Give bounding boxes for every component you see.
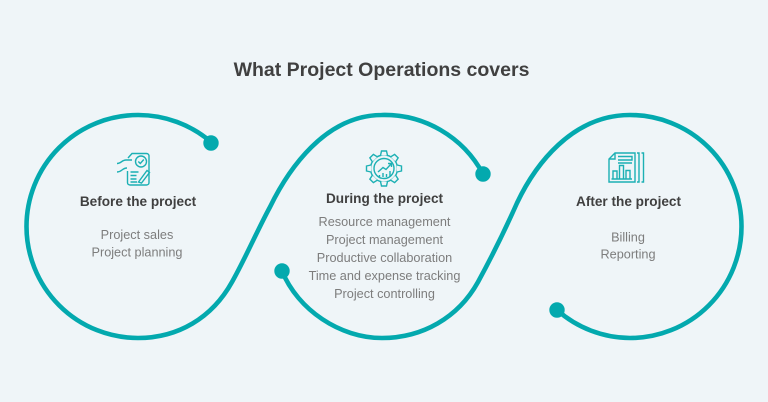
dot: last curve end <box>549 302 565 318</box>
text block: during items: Project controlling <box>334 287 435 301</box>
text block: after items <box>600 230 656 262</box>
text block: during items: Resource management <box>319 215 451 229</box>
text block: before items: Project sales <box>101 228 173 242</box>
text block: during items: Productive collaboration <box>317 251 452 265</box>
text block: before items <box>92 228 182 260</box>
panel: before the project <box>80 194 197 260</box>
heading: after: After the project <box>576 194 681 209</box>
text block: before items: Project planning <box>92 246 182 260</box>
flowing curve: first and middle loops <box>26 115 483 338</box>
text block: during items: Time and expense tracking <box>309 269 460 283</box>
title: What Project Operations covers <box>234 59 530 81</box>
icon: report with bar chart <box>609 153 644 182</box>
text block: after items: Billing <box>611 230 645 244</box>
dot: first curve end <box>203 135 219 151</box>
dot: middle curve start <box>274 263 290 279</box>
text block: during items <box>309 215 460 301</box>
heading: during: During the project <box>326 191 444 206</box>
text block: after items: Reporting <box>600 248 656 262</box>
heading: before: Before the project <box>80 194 197 209</box>
panel: after the project <box>576 194 681 262</box>
text block: during items: Project management <box>326 233 444 247</box>
icon: project document with checkmark <box>117 154 150 185</box>
icon: gear with chart <box>366 151 402 186</box>
flowing curve: middle and last loops <box>282 115 742 338</box>
dot: middle curve end <box>475 166 491 182</box>
panel: during the project <box>309 191 460 301</box>
